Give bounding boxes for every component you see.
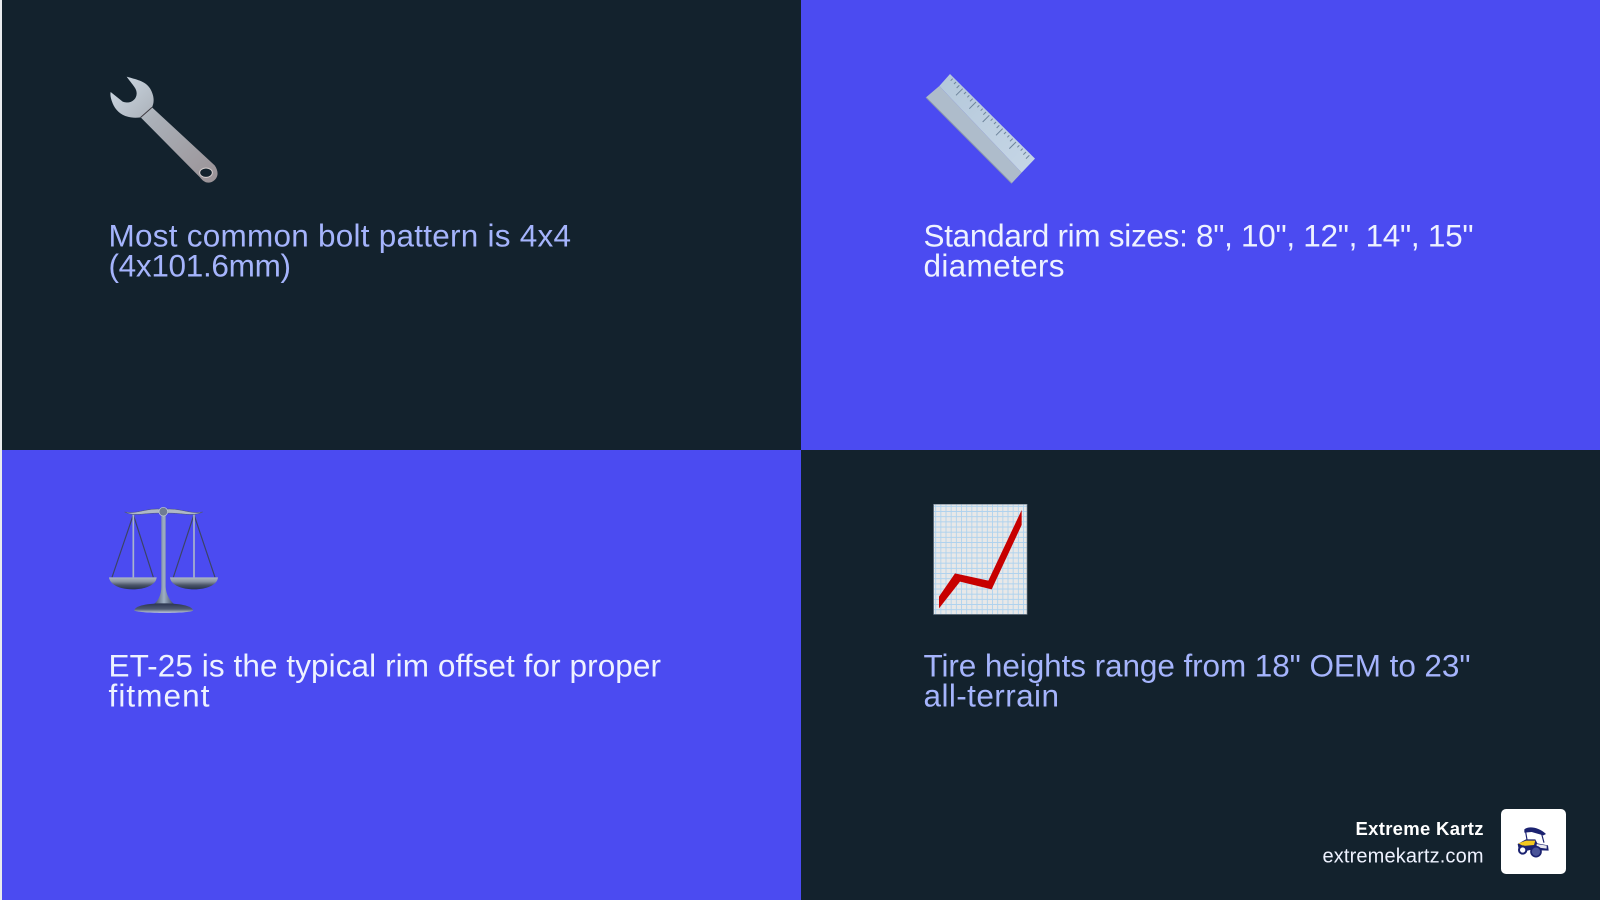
panel: bolt pattern <box>2 0 801 450</box>
text: tire heights fact: all-terrain <box>924 678 1059 714</box>
brand url: extremekartz.com <box>1322 846 1484 868</box>
text: rim offset fact: ET-25 is the typical rim offset for proper <box>108 648 661 684</box>
text: tire heights fact: Tire heights range from 18" OEM to 23" <box>924 648 1470 684</box>
text: bolt pattern fact: Most common bolt pattern is 4x4 <box>108 218 571 254</box>
panel: rim sizes <box>801 0 1600 450</box>
text: rim sizes fact: diameters <box>924 248 1064 284</box>
brand name: Extreme Kartz <box>1356 818 1484 839</box>
icon: rising line chart <box>934 504 1027 614</box>
icon: balance scale <box>109 507 218 613</box>
panel: rim offset <box>2 450 801 900</box>
logo tile <box>1501 809 1566 874</box>
icon: golf cart logo <box>1518 827 1549 857</box>
icon: ruler <box>926 74 1035 183</box>
text: rim sizes fact: Standard rim sizes: 8", 10", 12", 14", 15" <box>924 218 1474 254</box>
text: rim offset fact: fitment <box>108 678 210 714</box>
icon: wrench <box>110 77 218 183</box>
brand block <box>1322 809 1566 874</box>
text: bolt pattern fact: (4x101.6mm) <box>108 248 291 284</box>
panel: tire heights <box>801 450 1600 900</box>
